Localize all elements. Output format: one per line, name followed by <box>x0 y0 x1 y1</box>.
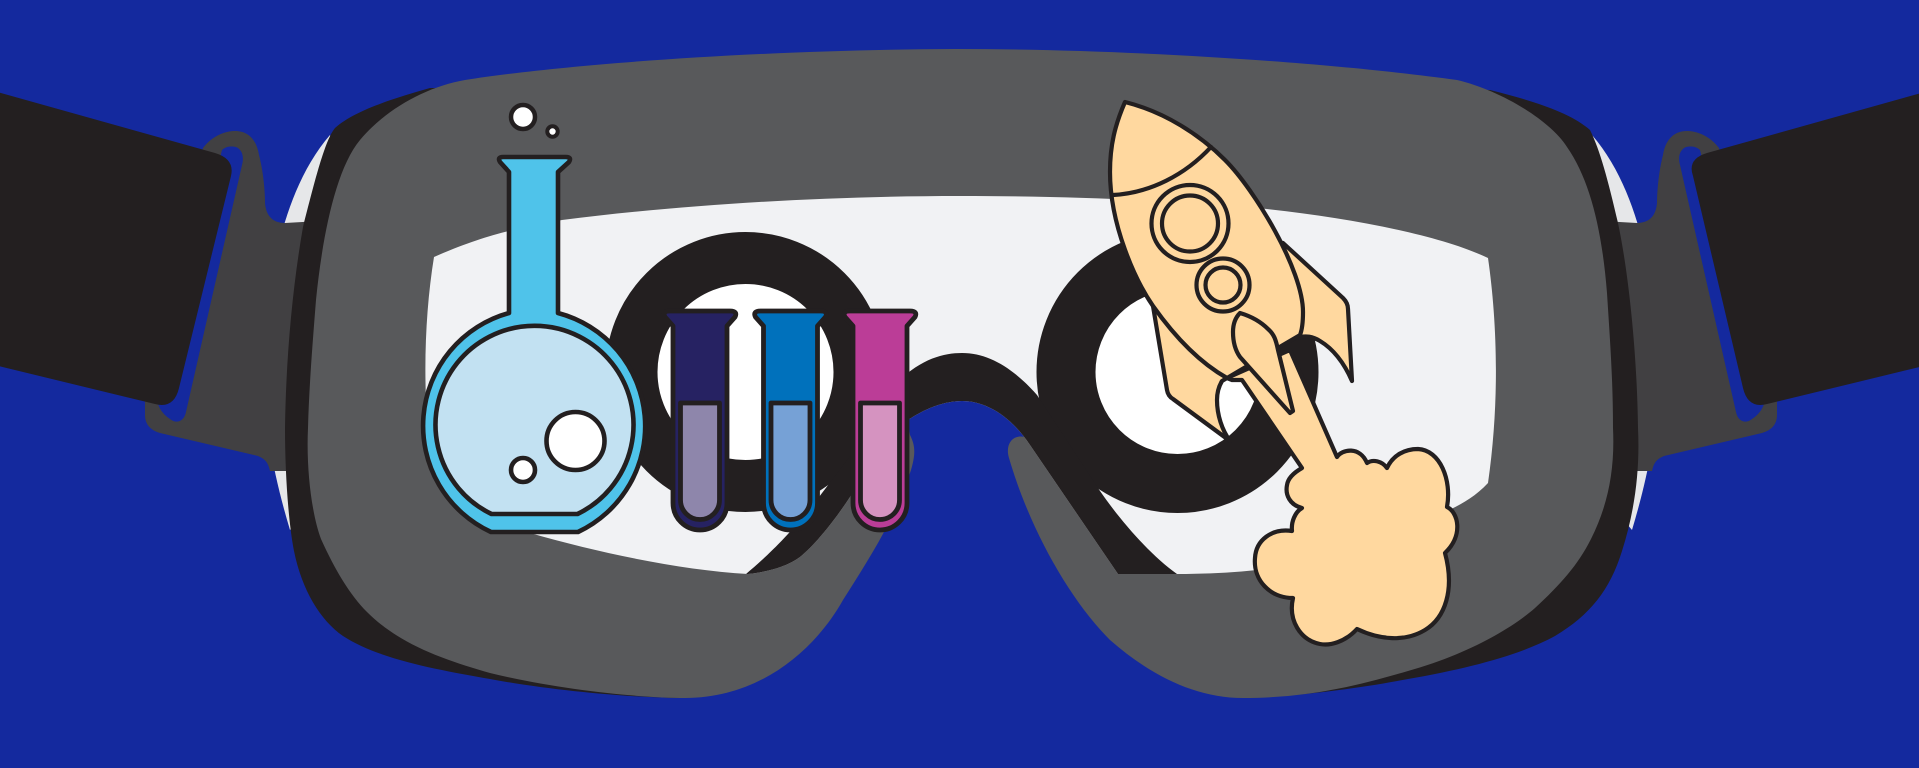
right fin <box>1283 243 1352 381</box>
right buckle slot <box>1679 146 1764 422</box>
icon: bubbles above flask <box>511 105 558 137</box>
right buckle <box>1602 131 1777 471</box>
dark lens rings and nose bridge <box>632 258 1289 590</box>
centre fin <box>1233 313 1293 413</box>
right ring <box>1066 260 1289 484</box>
headset grey front <box>308 49 1613 698</box>
icon: blue test tube <box>755 311 826 530</box>
nose bridge arch <box>909 353 1177 574</box>
left strap <box>0 90 232 405</box>
large window <box>1152 185 1228 262</box>
icon: rocket with exhaust cloud <box>1110 102 1457 644</box>
left fin <box>1153 306 1230 441</box>
exhaust stream and cloud <box>1227 350 1457 644</box>
left buckle <box>145 131 320 471</box>
right strap assembly <box>1522 90 1919 530</box>
icon: navy test tube <box>664 311 736 530</box>
left strap assembly <box>0 90 400 530</box>
visor lens area <box>425 196 1496 574</box>
right strap <box>1692 90 1919 405</box>
left lens lower band <box>746 464 851 574</box>
icon: magenta test tube <box>844 311 916 530</box>
small window <box>1196 258 1250 312</box>
nose cone line <box>1113 147 1211 195</box>
left lens backing <box>263 135 400 530</box>
icon: round bottom flask <box>423 157 645 532</box>
right lens backing <box>1522 135 1659 530</box>
rocket body <box>1110 102 1303 378</box>
left buckle slot <box>158 146 243 422</box>
headset dark shell <box>285 88 1638 698</box>
left ring <box>632 258 860 486</box>
